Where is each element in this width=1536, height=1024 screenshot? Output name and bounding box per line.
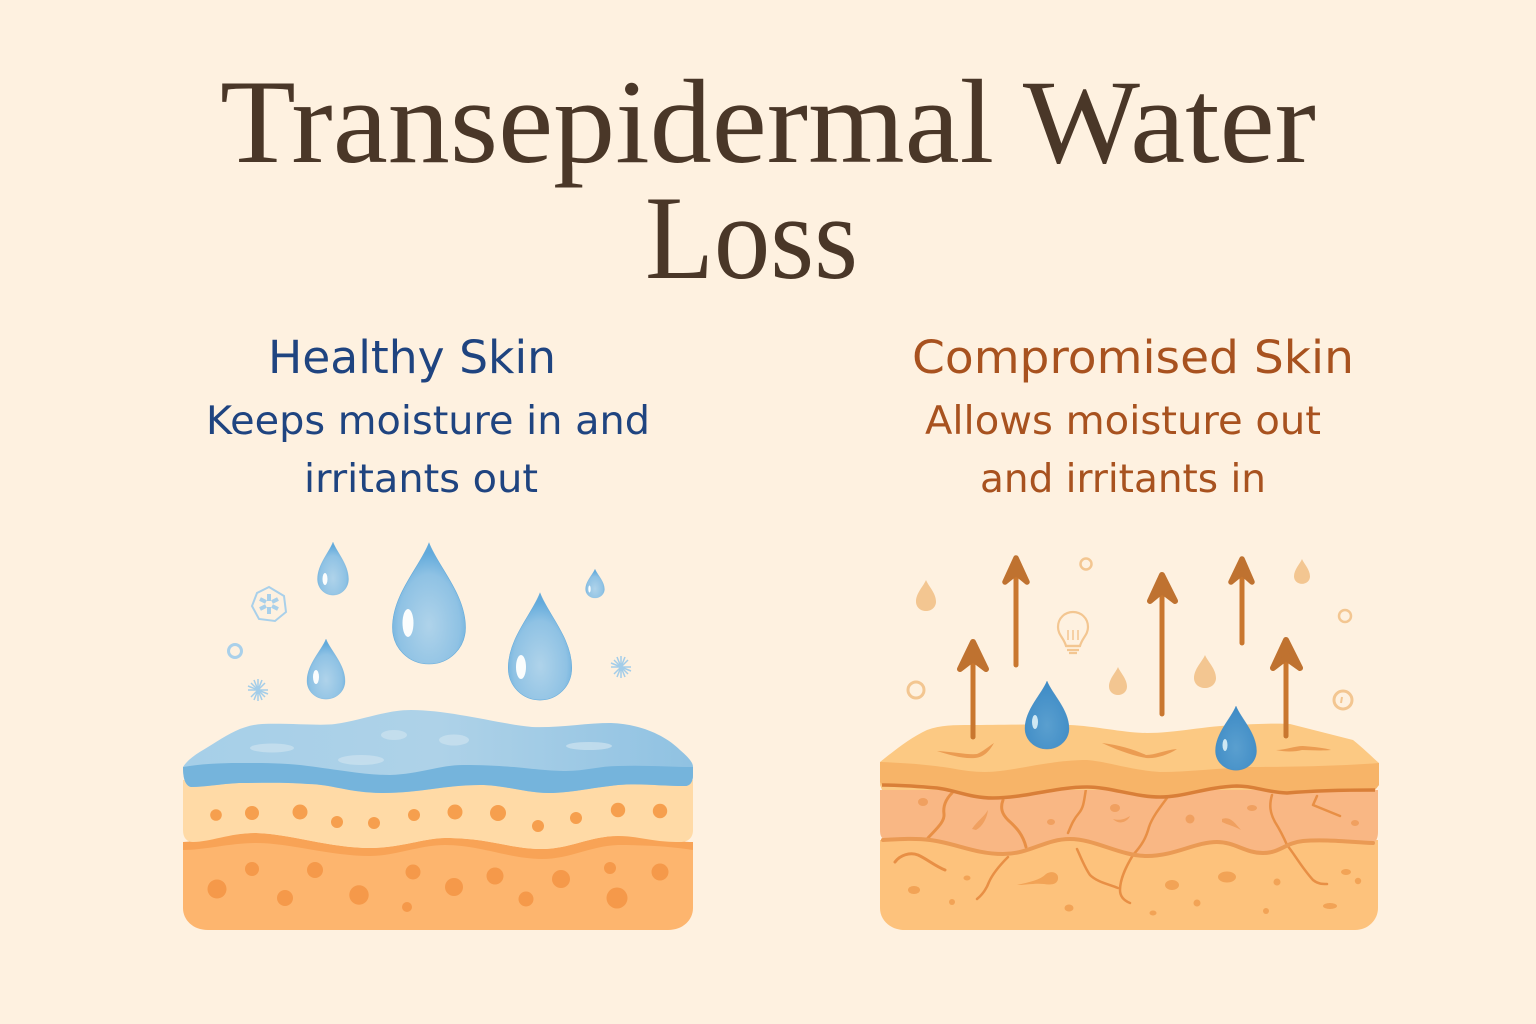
heading: healthy skin: Healthy Skin	[268, 331, 556, 384]
title: Loss	[645, 171, 858, 304]
text: healthy skin description	[206, 399, 650, 502]
title	[220, 55, 1316, 304]
top layer: water barrier	[183, 710, 693, 793]
top layer: dry surface	[880, 724, 1379, 798]
water drops falling	[307, 542, 604, 700]
icon: light bulb	[1058, 612, 1088, 653]
icon: snowflake hexagon	[252, 587, 286, 621]
panel: healthy skin illustration	[183, 542, 693, 930]
icon: ring	[228, 644, 242, 658]
arrow 3	[1150, 575, 1175, 714]
text: compromised skin description: Allows moisture out	[925, 399, 1321, 444]
middle layer marks	[918, 798, 1359, 830]
text: healthy skin description: Keeps moisture in and	[206, 399, 650, 444]
panel: compromised skin illustration	[880, 558, 1379, 930]
icon: snowflake left	[248, 679, 268, 701]
arrows: moisture escaping	[960, 558, 1300, 737]
arrow 1	[960, 642, 986, 737]
arrow 5	[1273, 640, 1300, 736]
middle layer: epidermis	[183, 780, 693, 849]
icon: snowflake right	[611, 656, 631, 678]
pale drops	[916, 559, 1310, 695]
arrow 2	[1005, 558, 1027, 665]
heading: compromised skin: Compromised Skin	[912, 331, 1354, 384]
middle layer: epidermis	[880, 790, 1378, 856]
text: compromised skin description	[925, 399, 1321, 502]
rings	[908, 558, 1352, 709]
title: Transepidermal Water	[220, 55, 1316, 188]
bottom layer: dermis	[183, 833, 693, 930]
text: compromised skin description: and irritants in	[980, 457, 1266, 502]
text: healthy skin description: irritants out	[304, 457, 538, 502]
arrow 4	[1231, 559, 1252, 643]
bottom layer: dermis	[880, 840, 1378, 930]
cracks	[883, 789, 1373, 903]
blue drops on surface	[1025, 681, 1256, 770]
